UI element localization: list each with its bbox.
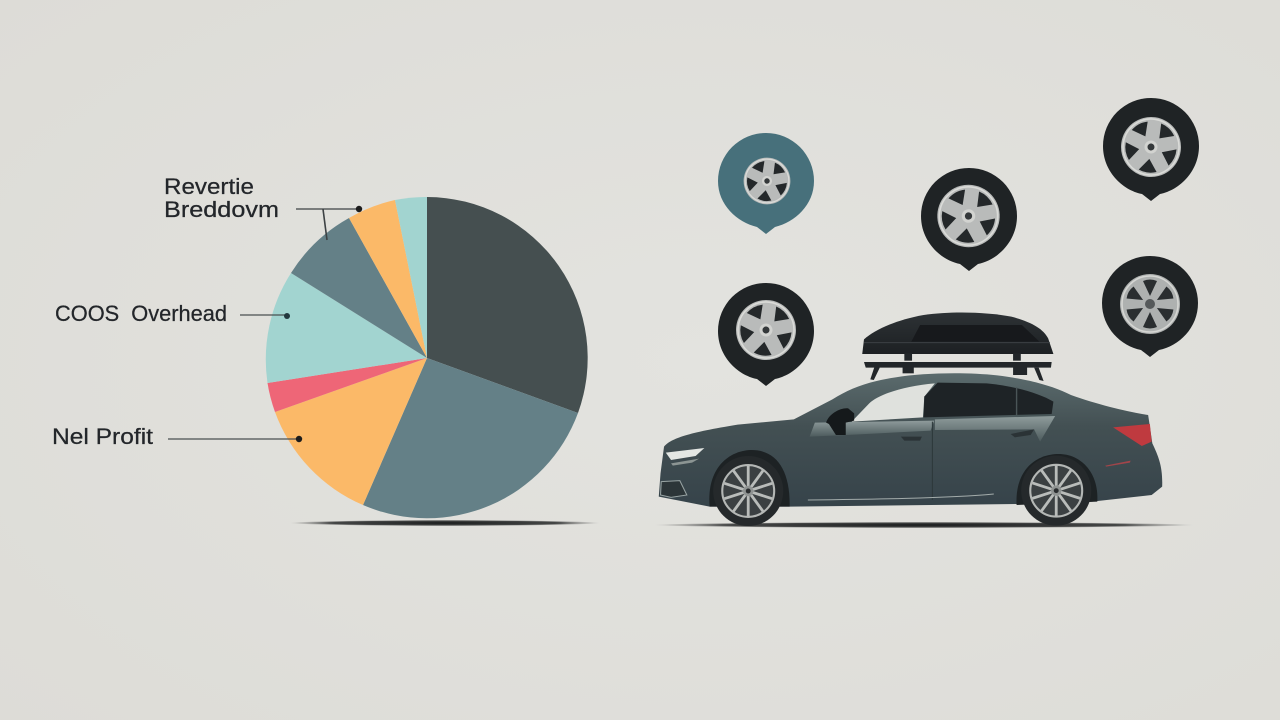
icon: wheel pin center bbox=[921, 168, 1017, 271]
rear wheel bbox=[1021, 456, 1091, 526]
wheel arches bbox=[709, 450, 1097, 507]
window strip highlights bbox=[810, 416, 1055, 442]
icon: wheel pin top right bbox=[1103, 98, 1199, 201]
rear window bbox=[924, 383, 1053, 417]
roof box bbox=[862, 313, 1053, 354]
label: net profit: Nel Profit bbox=[52, 424, 153, 449]
slice: orange large bbox=[275, 358, 427, 505]
front wheel bbox=[713, 456, 783, 526]
label: revenue breakdown: Revertie bbox=[164, 174, 254, 199]
slice: pink bbox=[268, 358, 427, 412]
door details bbox=[808, 422, 1034, 500]
rear window pillar bbox=[1015, 387, 1019, 415]
icon: teal wheel pin bbox=[718, 133, 814, 234]
label: revenue breakdown: Breddovm bbox=[164, 197, 279, 222]
icon: wheel pin lower left bbox=[718, 283, 814, 386]
icon: wheel pin lower right bbox=[1102, 256, 1198, 357]
tail light bbox=[1105, 424, 1152, 467]
pie ground shadow bbox=[290, 520, 600, 526]
pie chart: revenue breakdown bbox=[266, 197, 588, 518]
leader: revenue breakdown bbox=[296, 206, 362, 240]
mirror bbox=[826, 408, 854, 435]
slice: light teal small bbox=[395, 197, 427, 358]
slice: dark largest bbox=[427, 197, 588, 413]
headlight bbox=[661, 448, 704, 497]
label: COOS overhead: COOS Overhead bbox=[55, 301, 227, 326]
leader: COOS overhead bbox=[240, 313, 290, 319]
label: revenue breakdown bbox=[164, 174, 279, 222]
front window bbox=[852, 383, 935, 422]
slice: orange small bbox=[349, 200, 427, 358]
roof rack bbox=[864, 353, 1052, 381]
car ground shadow bbox=[654, 522, 1194, 528]
slice: slate bbox=[363, 358, 578, 518]
slice: light teal bbox=[266, 273, 427, 383]
leader: net profit bbox=[168, 436, 302, 442]
car body bbox=[659, 373, 1162, 507]
car with roof box bbox=[659, 313, 1162, 526]
slice: slate small bbox=[291, 218, 427, 358]
